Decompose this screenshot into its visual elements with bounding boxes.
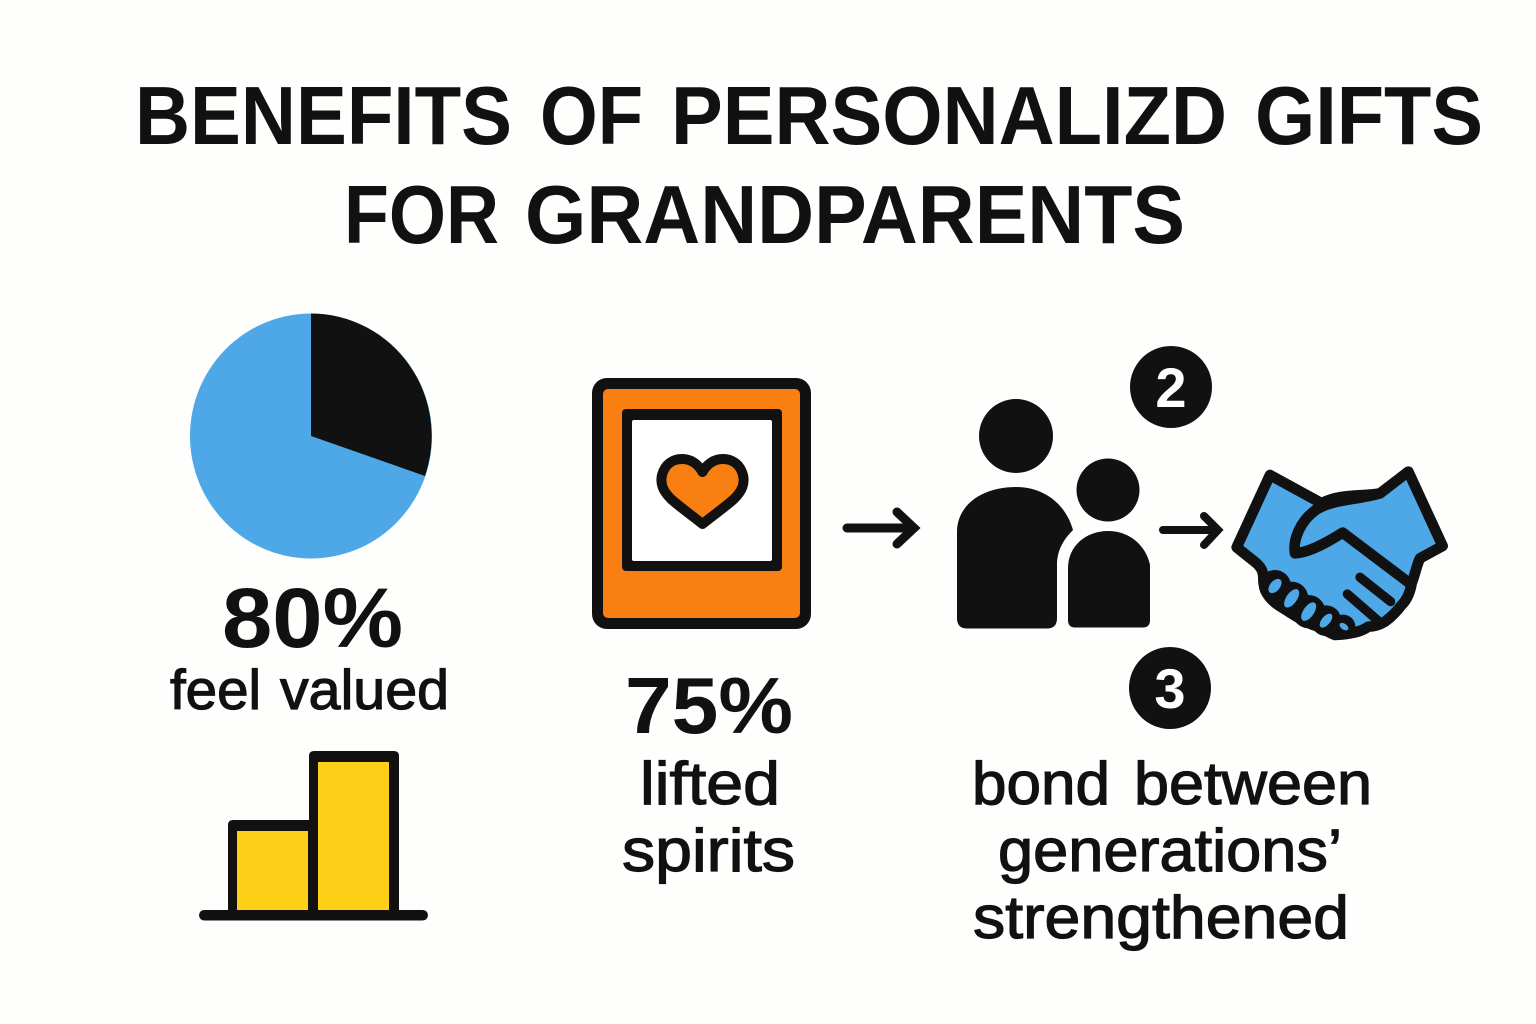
- stat: 80% feel valued: valued: [280, 658, 449, 721]
- stat: 80% feel valued: [170, 571, 449, 721]
- text: bond between generations strengthened: between: [1134, 750, 1372, 817]
- stat: 75% lifted spirits: 75%: [625, 661, 793, 750]
- text: bond between generations strengthened: strengthened: [973, 884, 1349, 951]
- text: bond between generations strengthened: [972, 750, 1372, 951]
- arrow: frame to family: [847, 512, 914, 544]
- pie chart: [190, 314, 432, 558]
- finger lines: [1347, 577, 1391, 621]
- title: BENEFITS: [135, 69, 512, 162]
- badge: 2: [1130, 346, 1212, 428]
- arrow: family to handshake: [1163, 516, 1218, 545]
- title: OF: [540, 69, 643, 162]
- stat: 80% feel valued: 80%: [222, 571, 403, 665]
- title: [135, 69, 1483, 261]
- stat: 75% lifted spirits: [622, 661, 795, 884]
- icon: handshake: [1237, 472, 1443, 639]
- thumb and palm line: [1295, 493, 1411, 584]
- badge: 3: [1129, 647, 1211, 729]
- stat: 75% lifted spirits: spirits: [622, 817, 795, 884]
- title: GRANDPARENTS: [525, 168, 1185, 261]
- text: bond between generations strengthened: bond: [972, 750, 1110, 817]
- icon: bar chart: [199, 751, 428, 920]
- stat: 80% feel valued: feel: [170, 658, 261, 721]
- badge: 3: 3: [1154, 657, 1186, 720]
- title: FOR: [344, 168, 499, 261]
- stat: 75% lifted spirits: lifted: [640, 750, 780, 817]
- icon: photo frame with heart: [592, 378, 811, 629]
- badge: 2: 2: [1155, 356, 1187, 419]
- text: bond between generations strengthened: generations’: [998, 817, 1342, 884]
- icon: grandparent and grandchild: [957, 399, 1150, 628]
- knuckles: [1259, 570, 1355, 639]
- title: PERSONALIZD: [671, 69, 1227, 162]
- icon: heart: [661, 459, 744, 524]
- title: GIFTS: [1255, 69, 1483, 162]
